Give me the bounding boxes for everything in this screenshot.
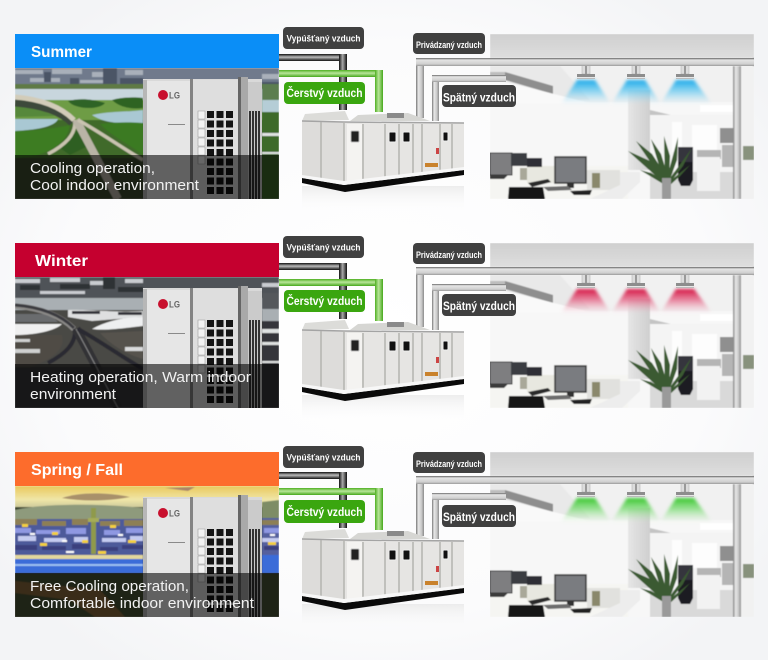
air handling unit and ducts [279, 263, 754, 421]
label: exhaust air: Vypúšťaný vzduch [286, 34, 360, 44]
winter heading [15, 243, 279, 277]
spring / fall caption: Comfortable indoor environment [30, 595, 255, 612]
spring photo: city at sunset and outdoor unit [15, 486, 279, 617]
summer caption: Cooling operation, [30, 160, 155, 177]
label: supply air: Privádzaný vzduch [416, 459, 482, 469]
panel: summer [15, 27, 754, 212]
office interior with blue diffusers [490, 34, 754, 199]
LG logo: LG [169, 300, 180, 310]
label: fresh air: Čerstvý vzduch [286, 293, 362, 308]
winter heading: Winter [35, 253, 88, 270]
label: supply air: Privádzaný vzduch [416, 40, 482, 50]
spring / fall caption: Free Cooling operation, [30, 578, 189, 595]
label: return air [442, 85, 516, 107]
summer heading: Summer [31, 44, 92, 61]
label: fresh air: Čerstvý vzduch [286, 85, 362, 100]
label: fresh air: Čerstvý vzduch [286, 504, 362, 519]
label: exhaust air [283, 236, 364, 258]
panel: winter [15, 236, 754, 421]
label: supply air: Privádzaný vzduch [416, 250, 482, 260]
LG logo: LG [169, 90, 180, 102]
label: return air: Spätný vzduch [443, 299, 515, 313]
label: exhaust air: Vypúšťaný vzduch [286, 242, 360, 252]
winter photo: highway and outdoor unit [15, 277, 279, 408]
spring / fall heading: Spring / Fall [31, 462, 123, 479]
spring / fall caption [15, 573, 279, 617]
label: return air: Spätný vzduch [443, 90, 515, 104]
label: exhaust air [283, 446, 364, 468]
label: supply air [413, 243, 485, 264]
label: supply air [413, 33, 485, 54]
office interior with red diffusers [490, 243, 754, 408]
LG logo: LG [169, 508, 180, 520]
label: fresh air [284, 500, 365, 523]
panel: spring and fall [15, 446, 754, 630]
winter caption: Heating operation, Warm indoor [30, 369, 251, 386]
label: exhaust air [283, 27, 364, 49]
label: fresh air [284, 82, 365, 104]
label: exhaust air: Vypúšťaný vzduch [286, 452, 360, 462]
summer caption [15, 155, 279, 199]
summer heading [15, 34, 279, 68]
summer photo: highway and outdoor unit [15, 68, 279, 199]
office interior with green diffusers [490, 452, 754, 617]
label: return air [442, 294, 516, 316]
label: return air: Spätný vzduch [443, 510, 515, 524]
label: return air [442, 505, 516, 527]
air handling unit and ducts [279, 472, 754, 630]
winter caption [15, 364, 279, 408]
summer caption: Cool indoor environment [30, 177, 200, 194]
spring / fall heading [15, 452, 279, 486]
label: fresh air [284, 290, 365, 312]
label: supply air [413, 452, 485, 473]
winter caption: environment [30, 386, 117, 403]
air handling unit and ducts [279, 54, 754, 212]
